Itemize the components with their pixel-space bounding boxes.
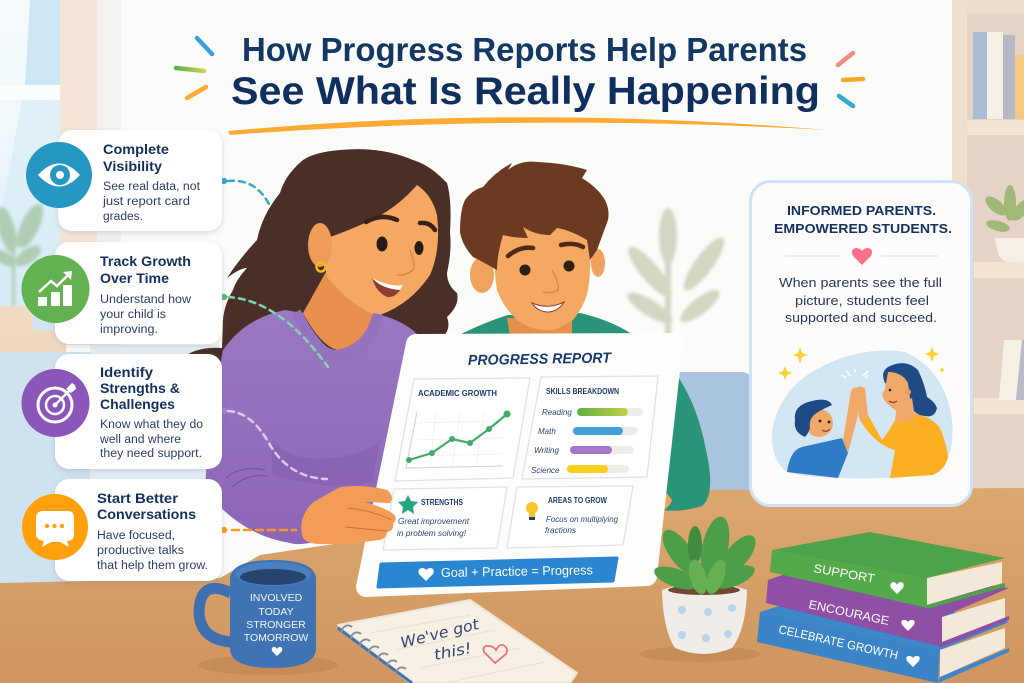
report box: skills breakdown: Writing — [534, 446, 559, 455]
report box: academic growth chart: ACADEMIC GROWTH — [418, 389, 497, 398]
title — [231, 31, 820, 113]
panel: complete visibility — [26, 130, 222, 231]
illustration: book stack — [757, 532, 1009, 683]
title underline — [228, 117, 827, 135]
panel heading: INFORMED PARENTS. — [787, 203, 936, 218]
book: celebrate growth — [757, 590, 1009, 683]
panel: strengths and challenges: Know what they do — [100, 419, 203, 431]
report box: skills breakdown: SKILLS BREAKDOWN — [546, 387, 619, 396]
illustration: notebook — [338, 600, 577, 683]
handwritten note — [399, 615, 482, 664]
report box: areas to grow: fractions — [545, 526, 576, 535]
panel: strengths and challenges: Identify — [100, 364, 153, 380]
connector: green dashed line — [222, 295, 328, 367]
panel: complete visibility: grades. — [103, 211, 143, 223]
panel heading — [774, 203, 952, 236]
panel: track growth: your child is — [100, 309, 166, 321]
report banner: Goal + Practice = Progress — [441, 562, 594, 580]
connector: purple dashed line — [222, 409, 327, 479]
panel: better conversations — [22, 479, 222, 581]
icon: light bulb — [526, 502, 538, 520]
illustration: mother's hand holding report — [301, 486, 396, 544]
book: support: SUPPORT — [812, 561, 877, 586]
panel: complete visibility: Complete — [103, 141, 169, 157]
panel: track growth: improving. — [100, 324, 158, 336]
book: celebrate growth: CELEBRATE GROWTH — [777, 622, 899, 662]
report box: areas to grow: AREAS TO GROW — [548, 496, 607, 505]
report box: strengths: in problem solving! — [397, 529, 467, 538]
book: encourage — [766, 562, 1009, 647]
report box: skills breakdown: Science — [531, 466, 560, 475]
panel body text: supported and succeed. — [785, 311, 937, 325]
panel: complete visibility: just report card — [102, 196, 190, 208]
mug text: TODAY — [258, 606, 294, 618]
panel: complete visibility: Visibility — [103, 158, 162, 174]
panel: track growth: Understand how — [100, 294, 192, 306]
panel: informed parents — [750, 182, 972, 506]
panel: track growth: Over Time — [100, 270, 169, 286]
mug text — [244, 592, 308, 644]
panel: strengths and challenges — [22, 354, 222, 469]
connector: orange dashed line — [222, 528, 296, 532]
mug text: TOMORROW — [244, 632, 308, 644]
icon: eye — [26, 142, 92, 208]
illustration: boy — [457, 162, 710, 515]
book: encourage: ENCOURAGE — [807, 597, 890, 628]
report box: skills breakdown: Math — [538, 427, 556, 436]
title: How Progress Reports Help Parents — [242, 31, 807, 68]
report box: areas to grow — [507, 486, 633, 548]
report box: strengths: STRENGTHS — [421, 498, 464, 507]
title sparks — [176, 38, 863, 106]
mug text: STRONGER — [246, 619, 306, 631]
panel: strengths and challenges: well and where — [99, 434, 181, 446]
report box: academic growth chart — [395, 378, 530, 481]
panel heading: EMPOWERED STUDENTS. — [774, 221, 952, 236]
illustration: mug — [198, 560, 338, 675]
heart divider — [785, 248, 938, 265]
handwritten note: We've got — [399, 615, 482, 652]
report box: skills breakdown — [522, 376, 658, 479]
panel: better conversations: productive talks — [97, 545, 184, 557]
report box: strengths: Great improvement — [398, 517, 470, 526]
title: See What Is Really Happening — [231, 70, 820, 113]
panel: better conversations: Start Better — [97, 490, 179, 506]
report box: skills breakdown: Reading — [542, 408, 572, 417]
report box: strengths — [383, 487, 507, 550]
report box: areas to grow: Focus on multiplying — [546, 515, 619, 524]
panel body text: When parents see the full — [779, 276, 942, 290]
panel: better conversations: Have focused, — [97, 530, 175, 542]
icon: speech bubble — [22, 494, 88, 560]
panel: strengths and challenges: Strengths & — [100, 380, 180, 396]
icon: target — [22, 369, 90, 437]
panel: progress report — [366, 343, 673, 587]
panel: strengths and challenges: they need support. — [100, 448, 202, 460]
panel body text — [779, 276, 942, 325]
icon: growth chart — [22, 255, 90, 323]
panel: track growth — [22, 242, 222, 344]
illustration: potted plant — [640, 514, 762, 662]
connector: teal dashed line — [222, 179, 270, 206]
panel: track growth: Track Growth — [100, 253, 191, 269]
panel: complete visibility: See real data, not — [103, 181, 201, 193]
panel: better conversations: Conversations — [97, 506, 196, 522]
panel: strengths and challenges: Challenges — [100, 396, 175, 412]
book: support — [770, 532, 1005, 609]
report banner — [378, 558, 617, 587]
mug text: INVOLVED — [250, 592, 303, 604]
wooden table — [0, 488, 1024, 683]
panel: better conversations: that help them grow. — [97, 560, 208, 572]
illustration: mother — [180, 149, 458, 544]
panel body text: picture, students feel — [795, 294, 929, 308]
report heading: PROGRESS REPORT — [468, 350, 612, 369]
handwritten note: this! — [432, 639, 473, 664]
illustration: high five — [772, 347, 953, 478]
